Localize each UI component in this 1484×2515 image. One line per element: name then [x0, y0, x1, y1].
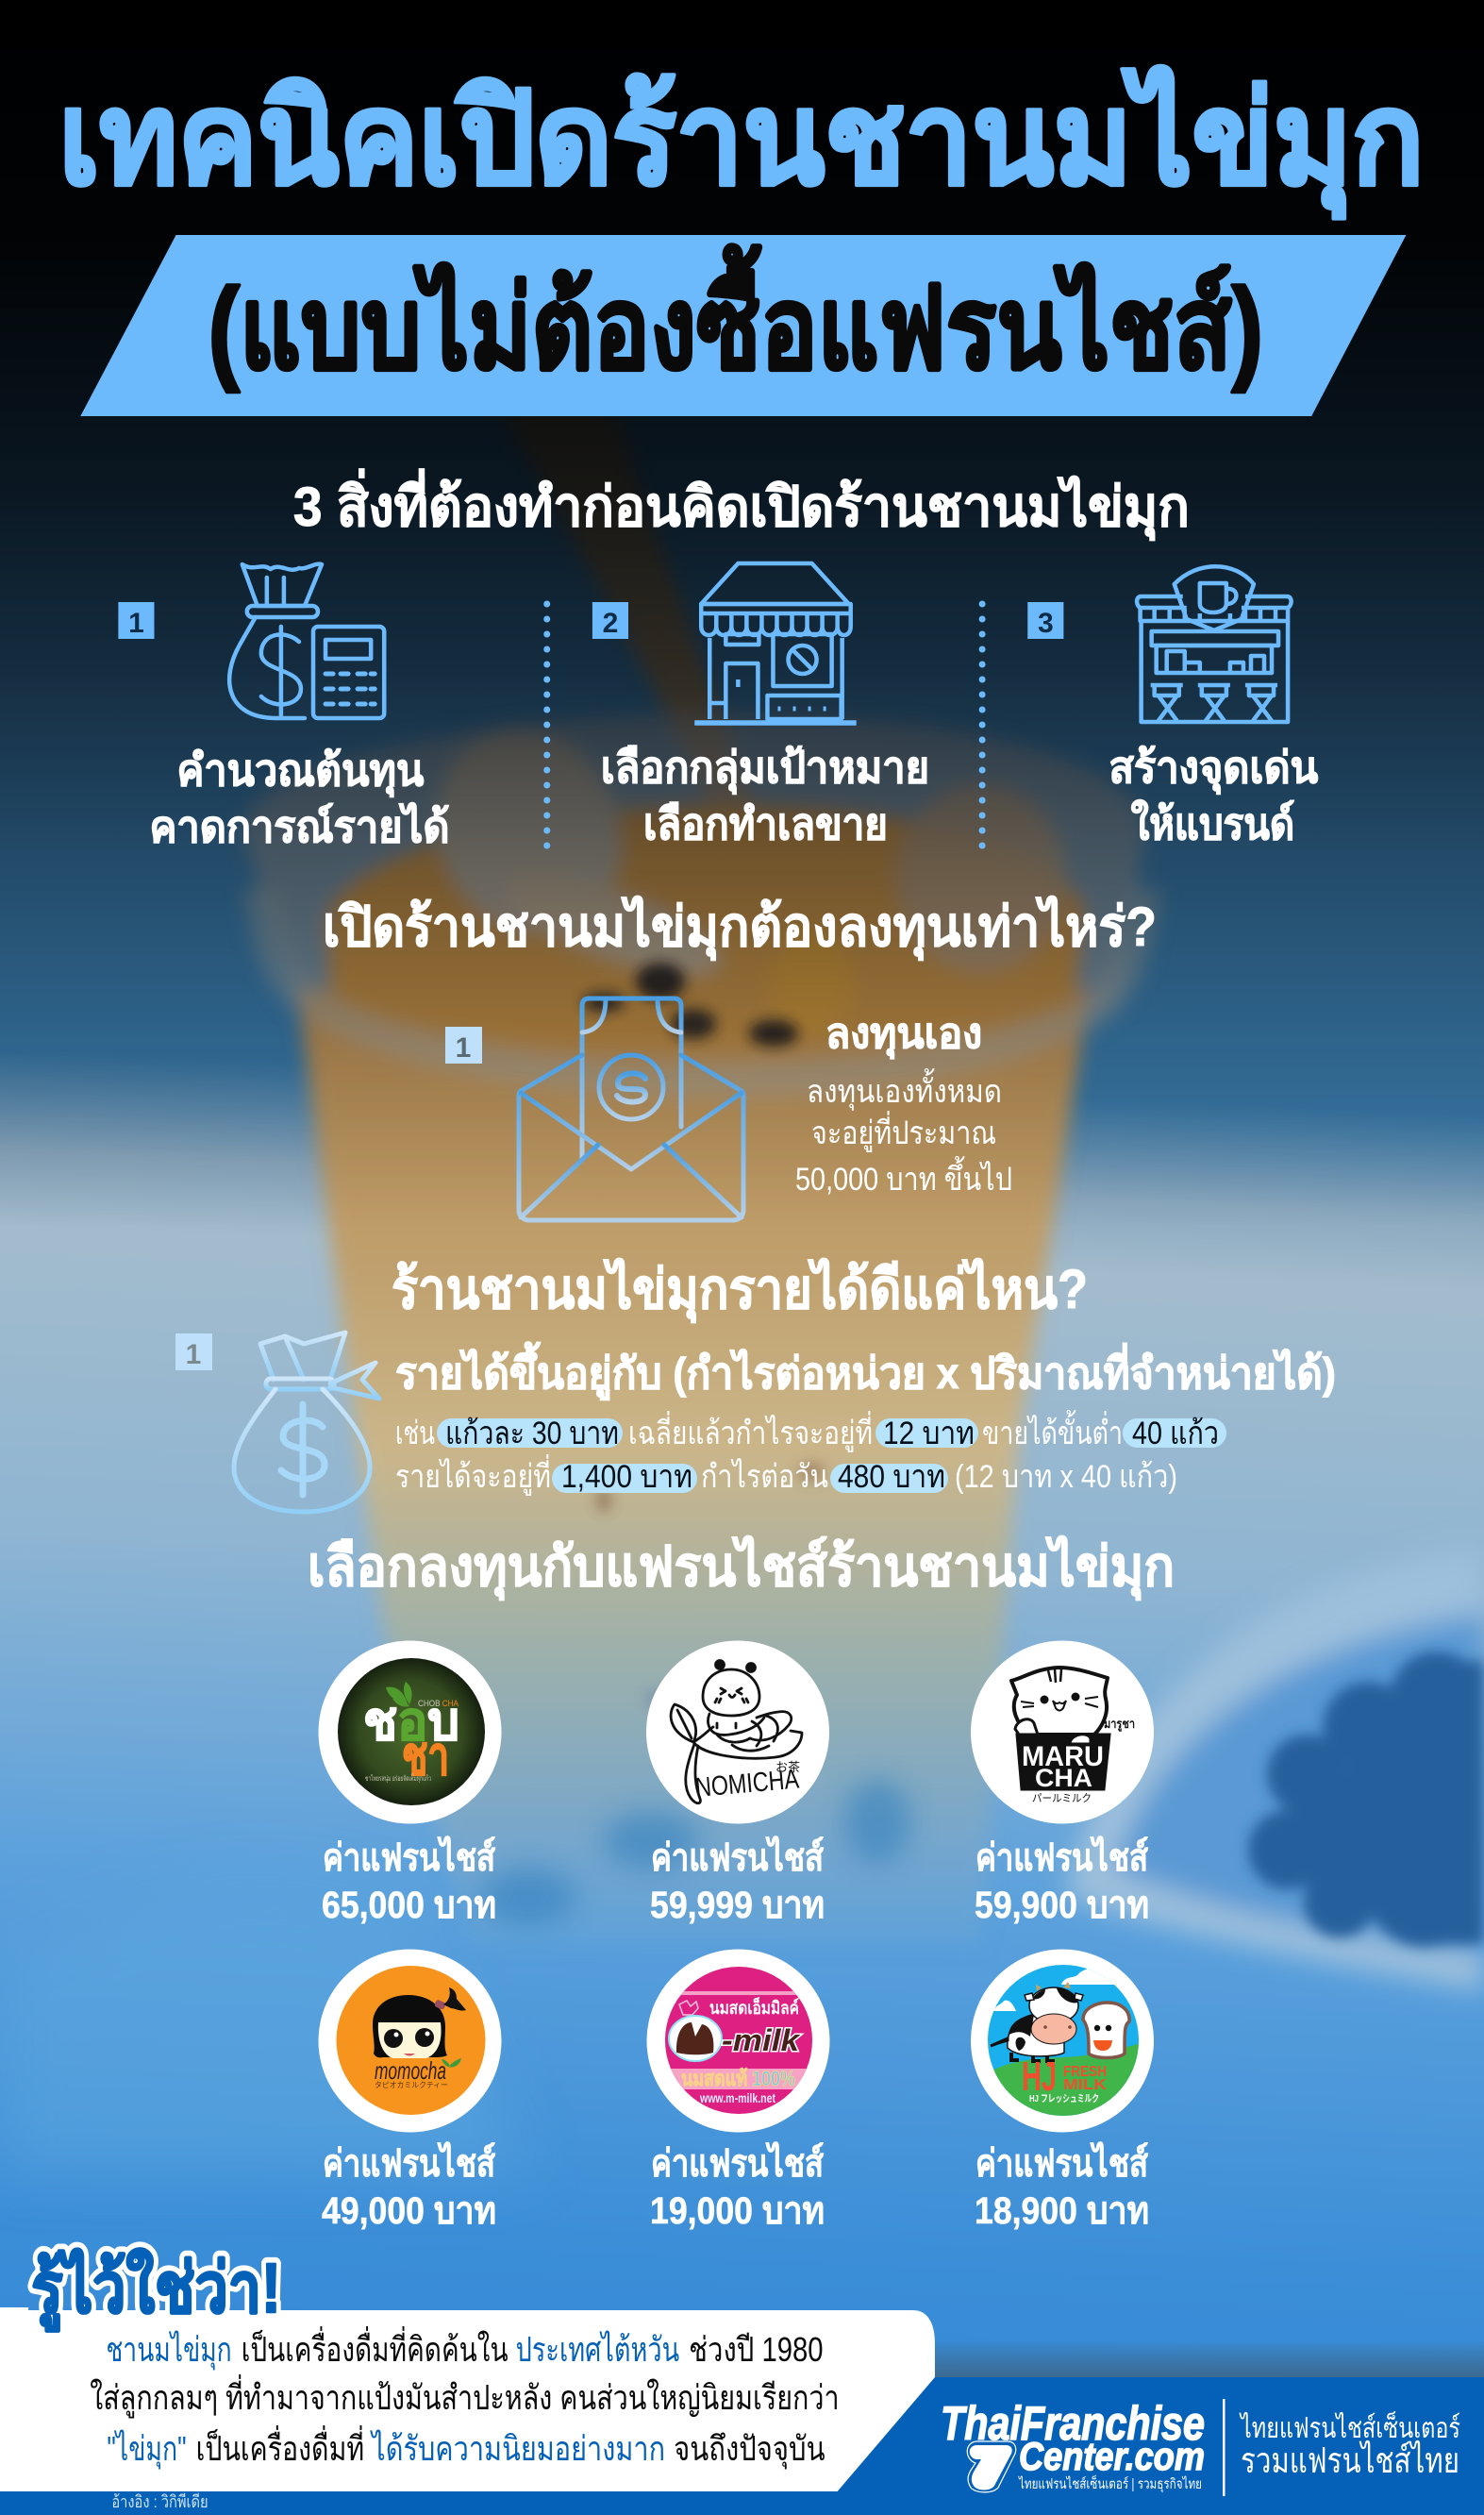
dotted divider right [979, 600, 986, 849]
line 3: ได้รับความนิยมอย่างมาก [370, 2429, 665, 2468]
example line 2: (12 บาท x 40 แก้ว) [955, 1459, 1177, 1495]
heading: รู้ไว้ใช่ว่า! [31, 2247, 281, 2332]
franchise card: HJ Fresh Milk: HJ [1022, 2054, 1057, 2100]
example line 1 [395, 1410, 1226, 1452]
franchise card: M-milk: www.m-milk.net [699, 2090, 775, 2105]
line 1: ประเทศไต้หวัน [516, 2330, 679, 2369]
franchise card: HJ Fresh Milk [971, 1950, 1154, 2232]
heading: รู้ไว้ใช่ว่า! [31, 2247, 281, 2332]
price [650, 2141, 825, 2232]
label [1109, 743, 1319, 848]
cup body [297, 991, 1090, 1944]
franchise card: HJ Fresh Milk: FRESH [1063, 2064, 1107, 2080]
example line 1: ขายได้ขั้นต่ำ [982, 1410, 1123, 1451]
rim front [259, 887, 1146, 1081]
price [975, 1836, 1149, 1926]
text: จะอยู่ที่ประมาณ [811, 1111, 996, 1152]
step 2: 2 [603, 608, 618, 639]
label [601, 743, 929, 848]
franchise card: M-milk [647, 1950, 830, 2232]
icon: envelope with money [519, 998, 743, 1220]
line 1: เป็นเครื่องดื่มที่คิดค้นใน [242, 2326, 509, 2369]
price: 65,000 บาท [322, 1885, 496, 1926]
example line 1: แก้วละ 30 บาท [445, 1416, 619, 1451]
franchise card: Nomicha: NOMICHA [694, 1764, 801, 1803]
franchise card: Momocha: momocha [375, 2056, 446, 2085]
label: คาดการณ์รายได้ [149, 802, 449, 851]
franchise card: Maru Cha: มารูชา [1104, 1717, 1135, 1732]
price: 19,000 บาท [650, 2190, 825, 2232]
icon: money bag and calculator [229, 564, 384, 718]
franchise card: Maru Cha: MARU [1022, 1741, 1104, 1772]
price: ค่าแฟรนไชส์ [975, 2141, 1148, 2185]
subtitle banner [80, 235, 1406, 416]
franchise card: M-milk: นมสดแท้ 100% [681, 2067, 795, 2090]
footer tagline [1223, 2399, 1460, 2496]
line 3: เป็นเครื่องดื่มที่ [196, 2425, 364, 2468]
franchise card: Chob Cha [319, 1640, 502, 1926]
franchise card: Chob Cha: ชอบ [363, 1691, 459, 1751]
text: 50,000 บาท ขึ้นไป [795, 1156, 1012, 1198]
price: ค่าแฟรนไชส์ [651, 1836, 824, 1879]
liquid surface [325, 804, 1085, 1049]
icon: cafe storefront [1137, 566, 1292, 722]
example line 1: เฉลี่ยแล้วกำไรจะอยู่ที่ [628, 1411, 873, 1452]
panel: income [175, 1333, 1336, 1512]
price [322, 2141, 496, 2232]
logo: ThaiFranchise Center: ไทยแฟรนไชส์เซ็นเตอร์ | รวมธุรกิจไทย [1018, 2474, 1202, 2493]
franchise card: Momocha: タピオカミルクティー [375, 2081, 448, 2089]
subtitle banner: (แบบไม่ต้องซื้อแฟรนไชส์) [208, 244, 1263, 393]
icon: shop [694, 563, 857, 723]
price: ค่าแฟรนไชส์ [651, 2141, 824, 2185]
logo: ThaiFranchise Center [941, 2397, 1205, 2493]
price [322, 1836, 496, 1926]
dotted divider left [543, 600, 550, 849]
heading: 3 things: 3 สิ่งที่ต้องทำก่อนคิดเปิดร้านชานมไข่มุก [293, 468, 1190, 542]
heading: franchise options: เลือกลงทุนกับแฟรนไชส์ร้านชานมไข่มุก [308, 1535, 1175, 1601]
step 1: 1 [128, 608, 144, 639]
price: ค่าแฟรนไชส์ [975, 1836, 1148, 1879]
panel: self investment [445, 998, 1012, 1220]
price: 18,900 บาท [975, 2190, 1149, 2232]
label: สร้างจุดเด่น [1109, 743, 1319, 795]
source note: อ้างอิง : วิกิพีเดีย [111, 2492, 208, 2511]
franchise card: Chob Cha: ชาไทยรสนุ่ม อร่อยจัดเต็มทุกแก้ว [365, 1773, 431, 1783]
icon: arrow [967, 2441, 1016, 2492]
step 1 [118, 564, 449, 851]
label: เลือกกลุ่มเป้าหมาย [601, 743, 929, 795]
label: เลือกทำเลขาย [643, 799, 888, 848]
text [795, 1011, 1012, 1198]
franchise card: Nomicha [646, 1640, 829, 1926]
stream [500, 406, 788, 906]
franchise card: Momocha [319, 1950, 502, 2232]
line 3: "ไข่มุก" [107, 2429, 187, 2470]
text: ลงทุนเองทั้งหมด [807, 1068, 1002, 1111]
price: ค่าแฟรนไชส์ [323, 1836, 495, 1879]
franchise card: Maru Cha: CHA [1035, 1764, 1092, 1792]
line 3: จนถึงปัจจุบัน [674, 2429, 825, 2470]
line 1 [106, 2326, 824, 2371]
label: ให้แบรนด์ [1131, 798, 1294, 848]
footer band [0, 2377, 1484, 2515]
logo: ThaiFranchise Center: ThaiFranchise [941, 2397, 1205, 2450]
example line 2: 480 บาท [838, 1459, 945, 1495]
line 2: ใส่ลูกกลมๆ ที่ทำมาจากแป้งมันสำปะหลัง คนส่วนใหญ่นิยมเรียกว่า [90, 2374, 840, 2419]
franchise card: Maru Cha: パールミルク [1032, 1792, 1092, 1804]
franchise card: HJ Fresh Milk: MILK [1063, 2077, 1108, 2093]
example line 1: เช่น [395, 1416, 435, 1451]
example line 2: รายได้จะอยู่ที่ [395, 1454, 551, 1496]
logo: ThaiFranchise Center: Center.com [1019, 2434, 1205, 2478]
step 3: 3 [1038, 608, 1054, 639]
label [149, 746, 449, 851]
franchise card: Chob Cha: ชา [402, 1726, 449, 1786]
franchise card: M-milk: นมสดเอ็มมิลค์ [709, 1996, 799, 2019]
example line 1: 12 บาท [883, 1416, 975, 1451]
price: 59,900 บาท [975, 1885, 1149, 1926]
example line 2: กำไรต่อวัน [701, 1458, 828, 1495]
formula: รายได้ขึ้นอยู่กับ (กำไรต่อหน่วย x ปริมาณที่จำหน่ายได้) [395, 1341, 1336, 1400]
panel: income: 1 [186, 1339, 201, 1370]
did-you-know panel [0, 2247, 935, 2491]
example line 2: 1,400 บาท [561, 1459, 692, 1495]
franchise card: Maru Cha [971, 1640, 1154, 1926]
icon: money bag [234, 1333, 379, 1512]
rim outer [241, 713, 1146, 1078]
label: คำนวณต้นทุน [177, 746, 425, 797]
price: 59,999 บาท [650, 1885, 825, 1926]
heading: how good is income: ร้านชานมไข่มุกรายได้ดีแค่ไหน? [392, 1258, 1088, 1324]
price: ค่าแฟรนไชส์ [323, 2141, 495, 2185]
step 3 [1027, 566, 1319, 848]
franchise card: HJ Fresh Milk: HJ フレッシュミルク [1029, 2093, 1099, 2104]
franchise card: M-milk: -milk [722, 2023, 801, 2057]
franchise card: Chob Cha: CHOB CHA [418, 1699, 459, 1709]
line 1: ชานมไข่มุก [106, 2330, 232, 2371]
example line 2 [395, 1454, 1177, 1496]
price [650, 1836, 825, 1926]
line 1: ช่วงปี 1980 [689, 2330, 824, 2369]
price: 49,000 บาท [322, 2190, 496, 2232]
panel: self investment: 1 [456, 1032, 471, 1064]
heading: how much to invest: เปิดร้านชานมไข่มุกต้องลงทุนเท่าไหร่? [323, 896, 1157, 962]
step 2 [592, 563, 929, 848]
franchise card: Nomicha: お茶 [775, 1760, 800, 1774]
text: ลงทุนเอง [825, 1011, 982, 1060]
line 3 [107, 2425, 825, 2470]
example line 1: 40 แก้ว [1132, 1416, 1219, 1451]
price [975, 2141, 1149, 2232]
